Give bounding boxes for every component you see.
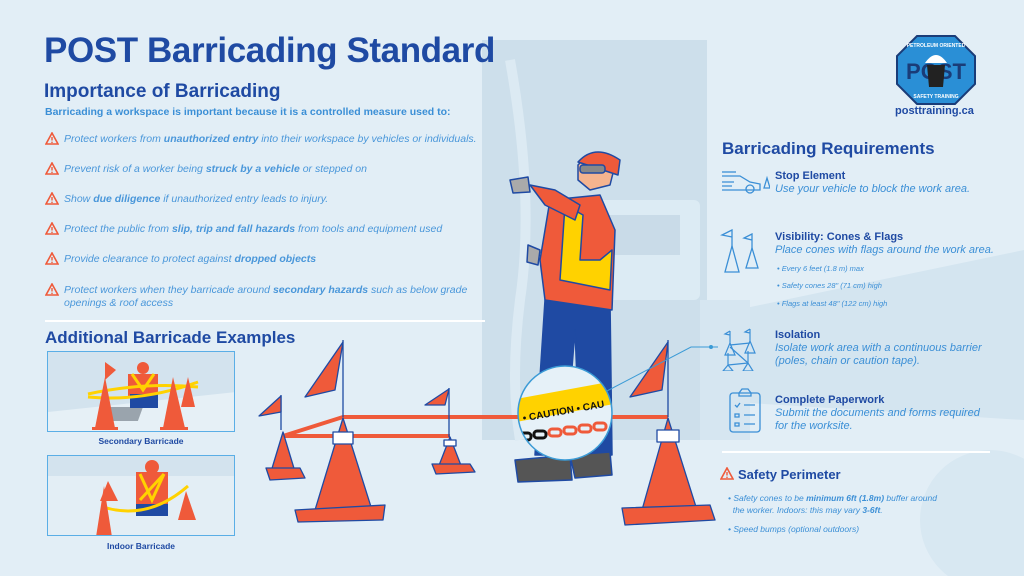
requirement: isolation bbox=[775, 329, 982, 367]
callout line bbox=[605, 347, 718, 392]
intro text: Barricading a workspace is important because it is a controlled measure used to: bbox=[45, 106, 451, 118]
logo: POST bbox=[906, 59, 967, 84]
worker bbox=[510, 152, 620, 482]
requirement: stop element: Use your vehicle to block the work area. bbox=[775, 183, 970, 195]
magnifier: caution tape and chain: • CAUTION • CAU bbox=[522, 399, 605, 424]
logo: SAFETY TRAINING bbox=[913, 94, 959, 100]
requirement: visibility bbox=[775, 231, 994, 256]
requirement: visibility: Place cones with flags around the work area. bbox=[775, 244, 994, 256]
heading: Importance of Barricading: Importance of Barricading bbox=[44, 81, 280, 102]
heading: Additional Barricade Examples: Additional Barricade Examples bbox=[45, 328, 295, 347]
title: POST Barricading Standard bbox=[44, 31, 495, 70]
safety perimeter bullets bbox=[728, 493, 938, 534]
bullet list: importance: Show due diligence if unauthorized entry leads to injury. bbox=[64, 193, 328, 205]
requirement: paperwork bbox=[775, 394, 980, 432]
cones and bars bbox=[259, 340, 715, 525]
heading: Safety Perimeter: Safety Perimeter bbox=[738, 467, 841, 482]
icon: isolation cones bbox=[722, 328, 756, 371]
bullet list: importance: Protect workers when they barricade around secondary hazards such as below grade openings & roof access bbox=[64, 284, 467, 309]
sub-bullets: visibility: • Safety cones 28" (71 cm) high bbox=[777, 281, 882, 290]
example: indoor barricade bbox=[47, 455, 235, 536]
safety perimeter bullets: the worker. Indoors: this may vary 3-6ft. bbox=[733, 504, 883, 514]
requirement: isolation: Isolation bbox=[775, 329, 820, 341]
caption: secondary barricade: Secondary Barricade bbox=[98, 436, 184, 446]
bullet list: importance bbox=[45, 132, 477, 309]
requirement: paperwork: Complete Paperwork bbox=[775, 394, 884, 406]
sub-bullets: visibility: • Every 6 feet (1.8 m) max bbox=[777, 264, 864, 273]
requirement: stop element bbox=[775, 170, 970, 195]
icon: clipboard bbox=[729, 388, 761, 433]
bullet list: importance: Protect workers from unauthorized entry into their workspace by vehicles or individuals. bbox=[64, 133, 477, 145]
requirement: visibility: Visibility: Cones & Flags bbox=[775, 231, 903, 243]
magnifier: caution tape and chain bbox=[517, 365, 613, 461]
requirement: paperwork: for the worksite. bbox=[775, 420, 853, 432]
bullet list: importance: Prevent risk of a worker being struck by a vehicle or stepped on bbox=[64, 163, 367, 175]
requirement: stop element: Stop Element bbox=[775, 170, 845, 182]
caption: indoor barricade: Indoor Barricade bbox=[107, 541, 175, 551]
icon: cones with flags bbox=[720, 229, 759, 273]
icon: car bbox=[722, 171, 770, 194]
bullet list: importance: Protect the public from slip, trip and fall hazards from tools and equipment used bbox=[64, 223, 442, 235]
bullet list: importance: Provide clearance to protect against dropped objects bbox=[64, 253, 316, 265]
logo bbox=[896, 35, 976, 105]
sub-bullets: visibility bbox=[777, 264, 887, 308]
website: posttraining.ca bbox=[895, 105, 974, 117]
requirement: paperwork: Submit the documents and forms required bbox=[775, 407, 980, 419]
sub-bullets: visibility: • Flags at least 48" (122 cm) high bbox=[777, 299, 887, 308]
logo: PETROLEUM ORIENTED bbox=[907, 43, 966, 49]
safety perimeter bullets: • Speed bumps (optional outdoors) bbox=[728, 524, 859, 534]
example: secondary barricade bbox=[47, 351, 235, 432]
safety perimeter bullets: • Safety cones to be minimum 6ft (1.8m) buffer around bbox=[728, 493, 937, 503]
requirement: isolation: (poles, chain or caution tape). bbox=[775, 355, 920, 367]
requirement: isolation: Isolate work area with a continuous barrier bbox=[775, 342, 982, 354]
heading: Barricading Requirements: Barricading Requirements bbox=[722, 139, 935, 158]
